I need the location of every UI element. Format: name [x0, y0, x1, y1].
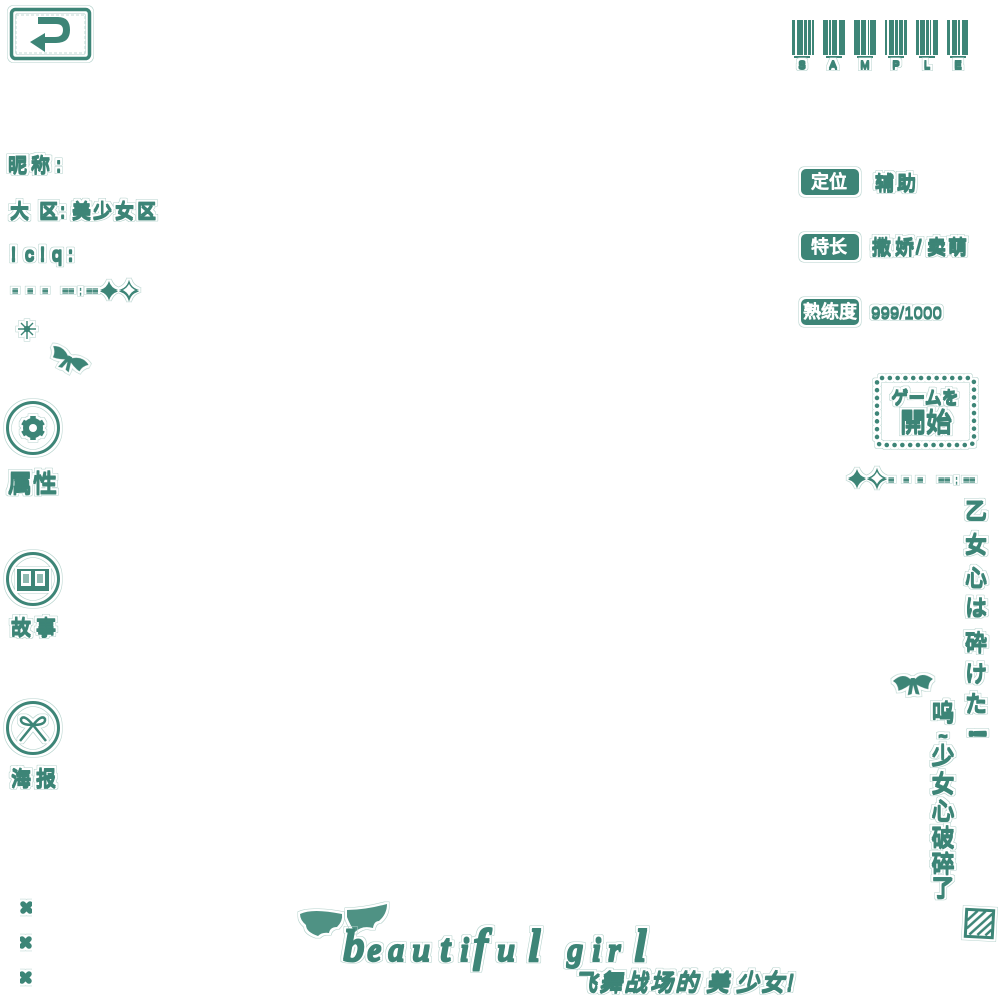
- button caption: ゲームを: [891, 388, 959, 407]
- icon: filled sparkle: [100, 281, 118, 299]
- barcode bars: [792, 20, 968, 58]
- vertical text: heart broken: 心: [932, 797, 954, 823]
- icon: x mark 3: [22, 974, 29, 981]
- server line: 大区:美少女区: [10, 200, 156, 222]
- decorative symbols left: [12, 281, 137, 299]
- icon: hollow sparkle: [121, 282, 137, 298]
- icon: x mark 1: [23, 904, 30, 911]
- decorative symbols right: [848, 469, 975, 487]
- title: beautiful girl: r: [608, 932, 622, 968]
- value: specialty: 撒娇/卖萌: [872, 236, 967, 258]
- icon: book in circle: [8, 554, 58, 604]
- title: beautiful girl: e: [367, 932, 382, 968]
- decorative symbols right: =====:==: [888, 474, 975, 486]
- proficiency row: [801, 299, 942, 325]
- vertical text: heart broken: 破: [932, 824, 954, 850]
- value: support: 辅助: [875, 172, 916, 194]
- vertical text: heart broken: 呜: [932, 699, 954, 725]
- barcode letters: E: [954, 59, 962, 71]
- decorative symbols left: =====:==: [12, 285, 98, 297]
- icon: x mark 2: [22, 939, 29, 946]
- nickname label: 昵称:: [8, 154, 61, 176]
- vertical text: heart broken: 女: [932, 770, 954, 796]
- icon: wing bow right: [893, 674, 934, 696]
- barcode letters: M: [860, 59, 870, 71]
- title: beautiful girl: i: [460, 932, 470, 968]
- poster nav item: [8, 702, 58, 790]
- icon: hollow sparkle right: [869, 470, 885, 486]
- vertical text: heart broken: 少: [932, 742, 954, 768]
- barcode letters: P: [892, 59, 900, 71]
- vertical text: heart broken: [932, 699, 954, 900]
- x marks: [22, 904, 30, 981]
- proficiency pill: [801, 299, 859, 325]
- value: proficiency: 999/1000: [871, 303, 942, 322]
- vertical text: maiden heart: 砕: [965, 630, 987, 655]
- vertical text: maiden heart: は: [965, 595, 987, 620]
- dotted frame: [877, 378, 974, 445]
- vertical text: maiden heart: け: [965, 661, 987, 686]
- vertical text: maiden heart: た: [965, 691, 987, 716]
- title: beautiful girl: a: [388, 932, 404, 968]
- barcode letters: A: [829, 59, 837, 71]
- pill text: specialty: 特长: [811, 237, 847, 257]
- icon: back arrow button: [12, 10, 90, 58]
- label: poster: 海报: [11, 767, 56, 790]
- vertical text: maiden heart: 女: [965, 532, 987, 557]
- icon: snowflake: [18, 321, 36, 339]
- title: beautiful girl: l: [528, 919, 541, 970]
- specialty pill: [801, 234, 859, 260]
- pill text: proficiency: 熟练度: [803, 302, 857, 322]
- icon: angel wings: [300, 904, 387, 936]
- barcode letters: L: [924, 59, 930, 71]
- label: attribute: 属性: [8, 470, 57, 497]
- icon: ribbon in circle: [8, 702, 58, 754]
- title: beautiful girl: u: [412, 932, 430, 968]
- attribute nav item: [8, 402, 58, 497]
- title: beautiful girl: i: [592, 932, 602, 968]
- vertical text: heart broken: 碎: [932, 850, 954, 876]
- vertical text: heart broken: ~: [938, 728, 948, 745]
- button title: 開始: [900, 407, 952, 437]
- title: beautiful girl: t: [440, 927, 452, 969]
- pill text: role: 定位: [811, 172, 847, 192]
- title: beautiful girl: u: [497, 932, 515, 968]
- title: beautiful girl: g: [566, 932, 584, 968]
- icon: hatched square: [965, 909, 994, 938]
- icon: wing bow left: [46, 344, 90, 379]
- title: beautiful girl: f: [473, 919, 493, 970]
- subtitle: 飞舞战场的美少女!: [574, 969, 794, 995]
- vertical text: heart broken: 了: [932, 874, 954, 900]
- icon: filled sparkle right: [848, 469, 866, 487]
- barcode: SAMPLE: [792, 20, 968, 71]
- qq line: !c!q:: [11, 244, 73, 264]
- story nav item: [8, 554, 58, 639]
- vertical text: maiden heart: !: [965, 730, 990, 736]
- game start button: [877, 378, 974, 445]
- barcode letters: S: [798, 59, 806, 71]
- vertical text: maiden heart: [965, 498, 990, 736]
- title: beautiful girl: l: [634, 919, 647, 970]
- icon: gear in circle: [8, 402, 58, 454]
- role row: [801, 169, 916, 195]
- specialty row: [801, 234, 967, 260]
- title: beautiful girl: b: [343, 921, 365, 970]
- vertical text: maiden heart: 乙: [965, 498, 987, 523]
- label: story: 故事: [11, 616, 56, 639]
- bottom title group: [300, 904, 794, 995]
- vertical text: maiden heart: 心: [965, 565, 987, 590]
